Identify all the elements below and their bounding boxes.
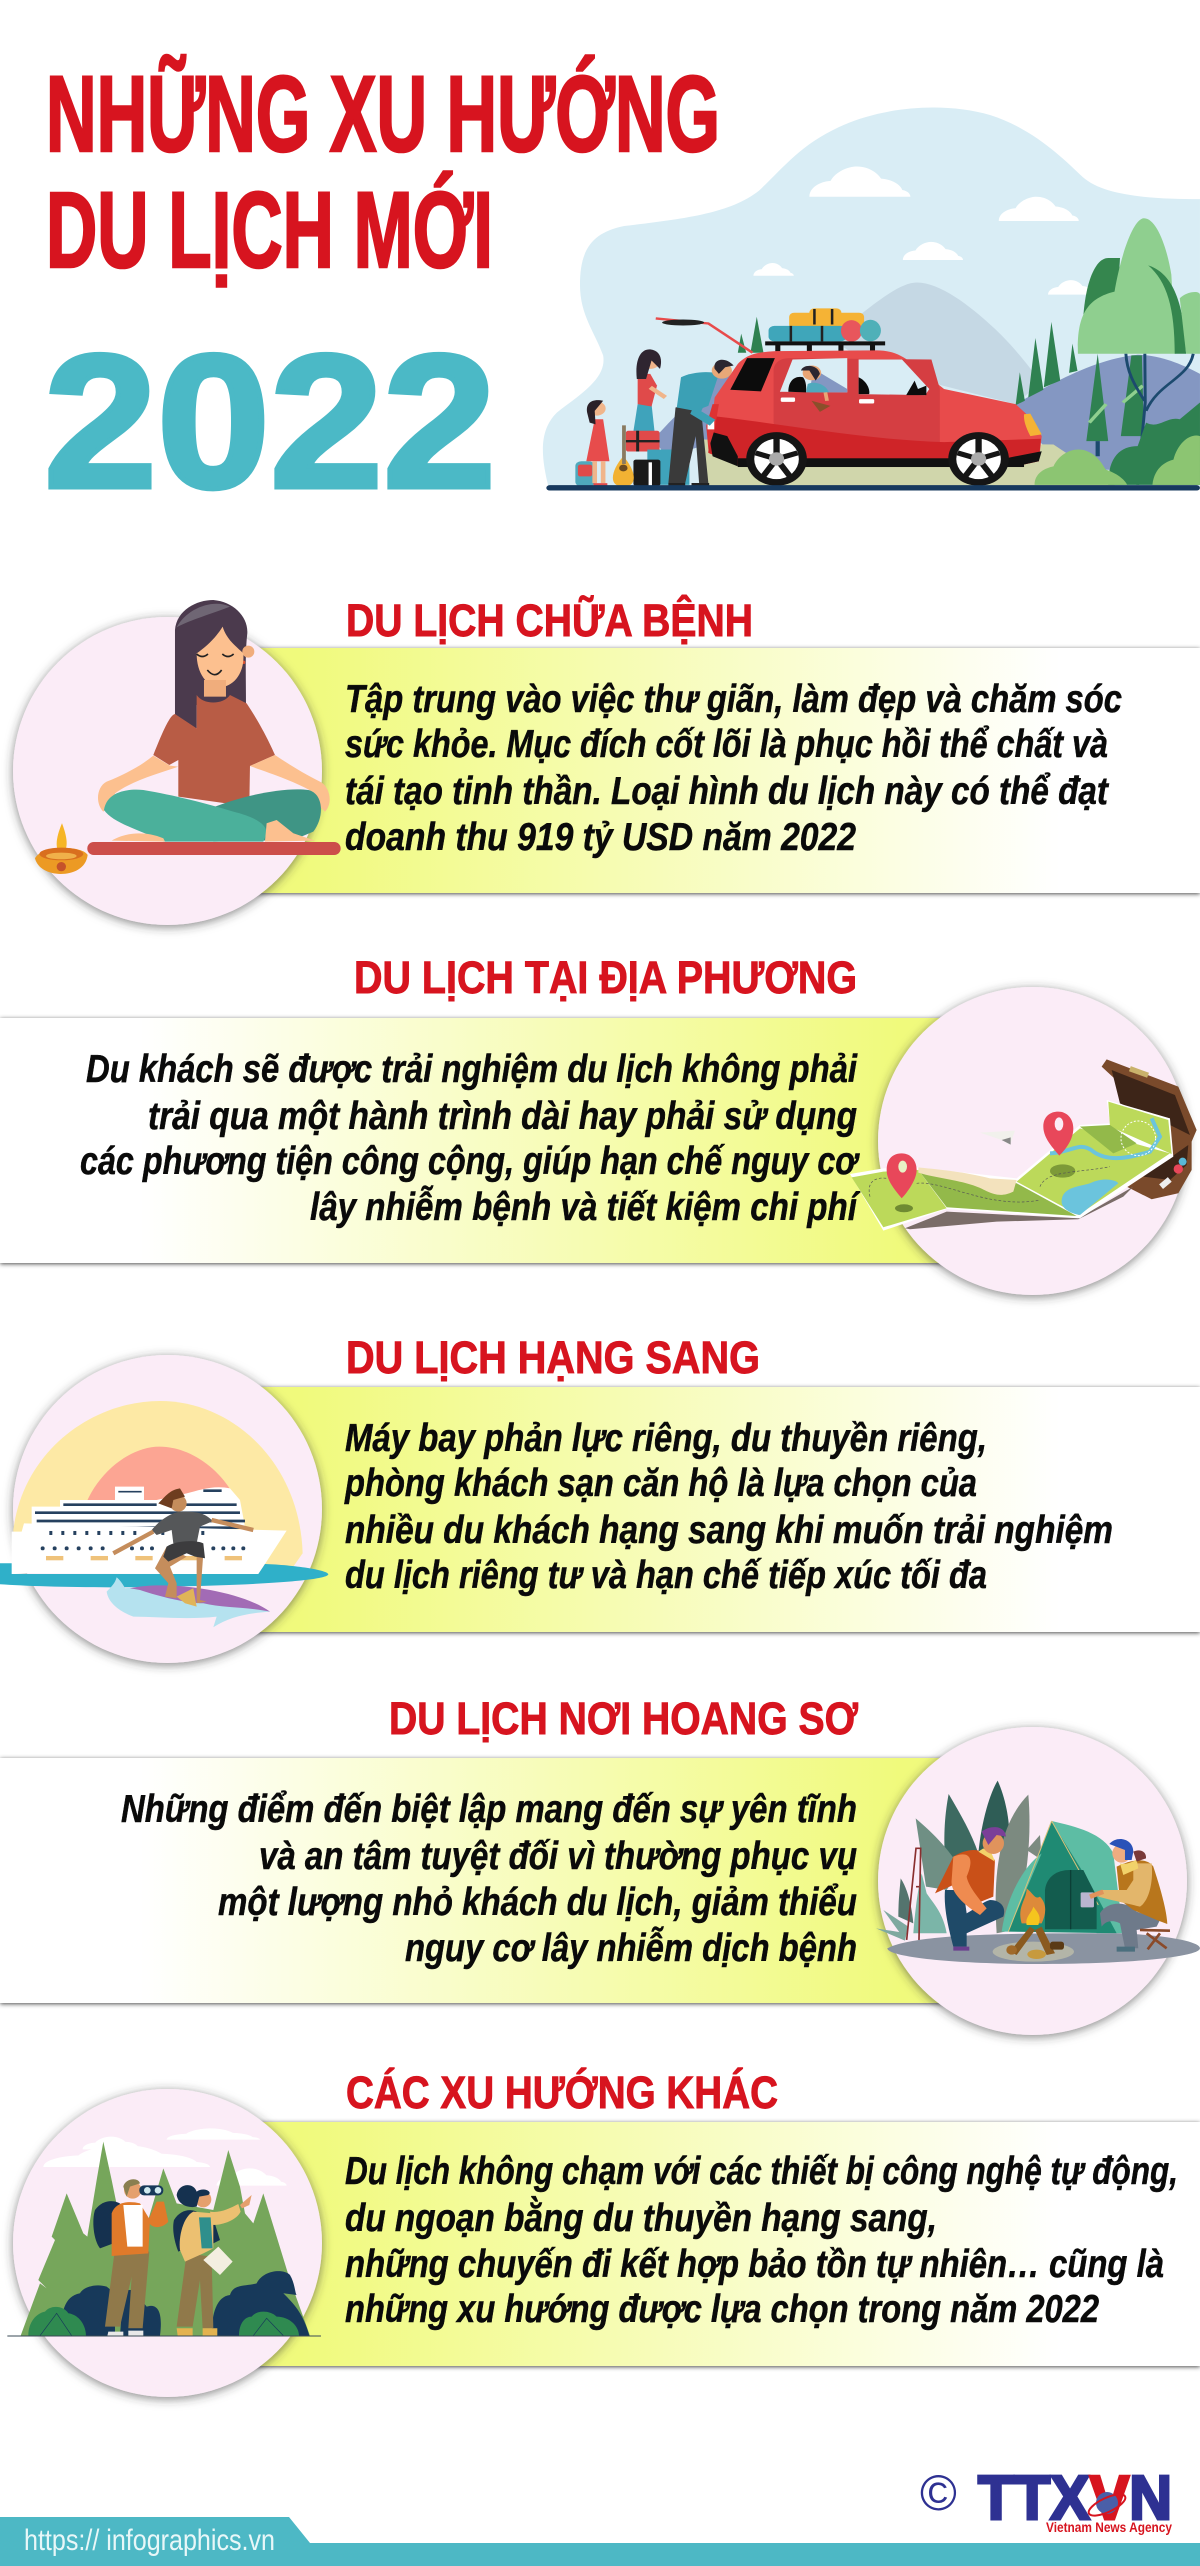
- copyright symbol: ©: [920, 2465, 957, 2521]
- body text: trải qua một hành trình dài hay phải sử dụng: [148, 1095, 857, 1138]
- icon: campers and tent: [876, 1781, 1200, 1964]
- woman right: [1100, 1904, 1160, 1948]
- heading: DU LỊCH NƠI HOANG SƠ: [389, 1693, 859, 1744]
- body text: du lịch riêng tư và hạn chế tiếp xúc tối đa: [345, 1554, 987, 1597]
- body text: [121, 1788, 857, 1970]
- heading: DU LỊCH HẠNG SANG: [346, 1332, 760, 1383]
- panel: du lịch tại địa phương: [0, 952, 1197, 1295]
- heading: CÁC XU HƯỚNG KHÁC: [346, 2067, 778, 2118]
- footer url: https:// infographics.vn: [24, 2524, 275, 2557]
- icon: folded map and suitcase: [850, 1059, 1197, 1231]
- body text: và an tâm tuyệt đối vì thường phục vụ: [259, 1835, 857, 1878]
- logo: TTXVN: Vietnam News Agency: [1046, 2520, 1172, 2535]
- body text: [344, 1417, 1113, 1597]
- body text: Những điểm đến biệt lập mang đến sự yên tĩnh: [121, 1788, 857, 1831]
- body text: lây nhiễm bệnh và tiết kiệm chi phí: [310, 1185, 861, 1229]
- body text: [345, 678, 1122, 859]
- body text: doanh thu 919 tỷ USD năm 2022: [345, 816, 856, 859]
- icon: meditating woman: [35, 600, 341, 874]
- car: [708, 350, 1042, 466]
- body text: du ngoạn bằng du thuyền hạng sang,: [345, 2196, 937, 2240]
- title: [46, 53, 720, 290]
- title: NHỮNG XU HƯỚNG: [46, 53, 720, 174]
- panel: du lịch hạng sang: [0, 1332, 1200, 1663]
- body text: Du khách sẽ được trải nghiệm du lịch không phải: [86, 1048, 858, 1091]
- child: [586, 400, 609, 485]
- wheels: [746, 432, 1009, 486]
- woman: [177, 2253, 213, 2328]
- body text: nguy cơ lây nhiễm dịch bệnh: [405, 1926, 857, 1970]
- footer band: [0, 2517, 1200, 2566]
- year 2022: 2022: [44, 316, 496, 528]
- body text: Máy bay phản lực riêng, du thuyền riêng,: [345, 1417, 987, 1460]
- father: [668, 360, 734, 485]
- man left: [945, 1890, 1004, 1947]
- heading: DU LỊCH CHỮA BỆNH: [346, 595, 753, 646]
- luggage and guitar: [575, 425, 689, 487]
- man: [105, 2248, 149, 2328]
- hatch lid: [656, 318, 753, 353]
- title: DU LỊCH MỚI: [46, 169, 493, 290]
- logo: TTXVN: TTXVN: [978, 2464, 1172, 2533]
- mother: [633, 349, 665, 431]
- roof luggage: [765, 308, 885, 351]
- body text: [80, 1048, 861, 1229]
- icon: cruise ship and surfer: [0, 1401, 328, 1627]
- big tree: [1083, 258, 1120, 322]
- body text: [345, 2150, 1178, 2331]
- fire: [1020, 1888, 1045, 1923]
- panel: du lịch nơi hoang sơ: [0, 1693, 1200, 2035]
- body text: các phương tiện công cộng, giúp hạn chế nguy cơ: [80, 1140, 860, 1183]
- icon: hikers in forest: [7, 2128, 321, 2336]
- heading: DU LỊCH TẠI ĐỊA PHƯƠNG: [354, 952, 857, 1003]
- illustration: family road trip: [543, 108, 1200, 491]
- panel: các xu hướng khác: [7, 2067, 1200, 2397]
- panel: du lịch chữa bệnh: [13, 595, 1200, 925]
- body text: một lượng nhỏ khách du lịch, giảm thiểu: [218, 1881, 857, 1924]
- body text: phòng khách sạn căn hộ là lựa chọn của: [344, 1462, 977, 1505]
